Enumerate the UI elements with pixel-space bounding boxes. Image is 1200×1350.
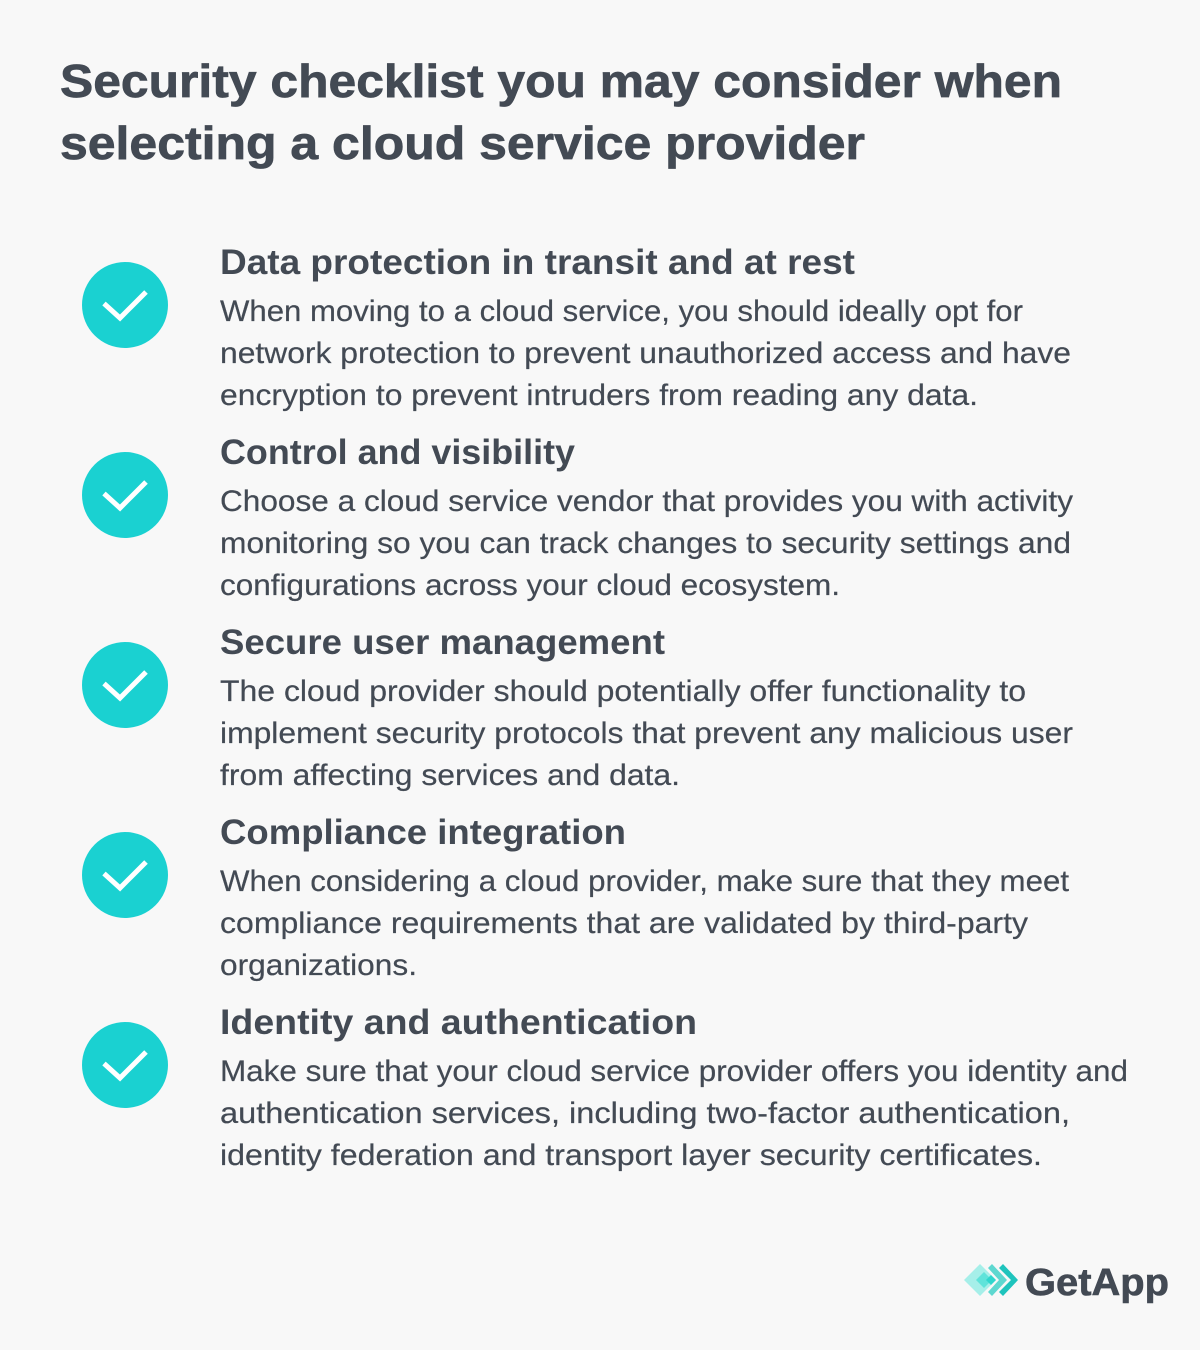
checklist item: compliance integration [82,813,1070,982]
checklist item: identity and authentication [82,1003,1128,1172]
title: selecting a cloud service provider [60,117,865,169]
checklist item: data protection [82,243,1071,412]
text: secure user management description: implement security protocols that prevent any malicious user [220,717,1073,750]
icon: check circle [82,452,168,538]
text: data protection description: network protection to prevent unauthorized access and have [220,337,1071,370]
checklist item: secure user management [82,623,1073,792]
text: identity and authentication description: Make sure that your cloud service provider offers you identity and [220,1055,1128,1088]
text: control and visibility description: configurations across your cloud ecosystem. [220,569,840,602]
heading: data protection: Data protection in transit and at rest [220,243,855,282]
text: data protection description: When moving to a cloud service, you should ideally opt for [220,295,1023,328]
text: compliance integration description: When considering a cloud provider, make sure that they meet [220,865,1070,898]
icon: GetApp diamonds [964,1264,1018,1296]
icon: check circle [82,1022,168,1108]
text: data protection description [220,295,1071,412]
heading: secure user management: Secure user management [220,623,665,662]
icon: check circle [82,832,168,918]
icon: check circle [82,642,168,728]
text: control and visibility description: monitoring so you can track changes to security settings and [220,527,1071,560]
title [60,55,1062,169]
text: compliance integration description: compliance requirements that are validated by third-party [220,907,1028,940]
icon: check circle [82,262,168,348]
text: secure user management description: from affecting services and data. [220,759,680,792]
text: compliance integration description [220,865,1070,982]
text: data protection description: encryption to prevent intruders from reading any data. [220,379,978,412]
text: secure user management description: The cloud provider should potentially offer functionality to [220,675,1026,708]
text: compliance integration description: organizations. [220,949,417,982]
heading: control and visibility: Control and visibility [220,433,576,472]
heading: compliance integration: Compliance integration [220,813,626,852]
text: secure user management description [220,675,1073,792]
text: control and visibility description: Choose a cloud service vendor that provides you with activity [220,485,1073,518]
logo: GetApp [964,1262,1169,1304]
text: identity and authentication description: authentication services, including two-factor authentication, [220,1097,1070,1130]
text: GetApp wordmark: GetApp [1025,1262,1169,1304]
checklist item: control and visibility [82,433,1073,602]
title: Security checklist you may consider when [60,55,1062,107]
text: control and visibility description [220,485,1073,602]
heading: identity and authentication: Identity and authentication [220,1003,697,1042]
text: identity and authentication description [220,1055,1128,1172]
text: identity and authentication description: identity federation and transport layer security certificates. [220,1139,1042,1172]
